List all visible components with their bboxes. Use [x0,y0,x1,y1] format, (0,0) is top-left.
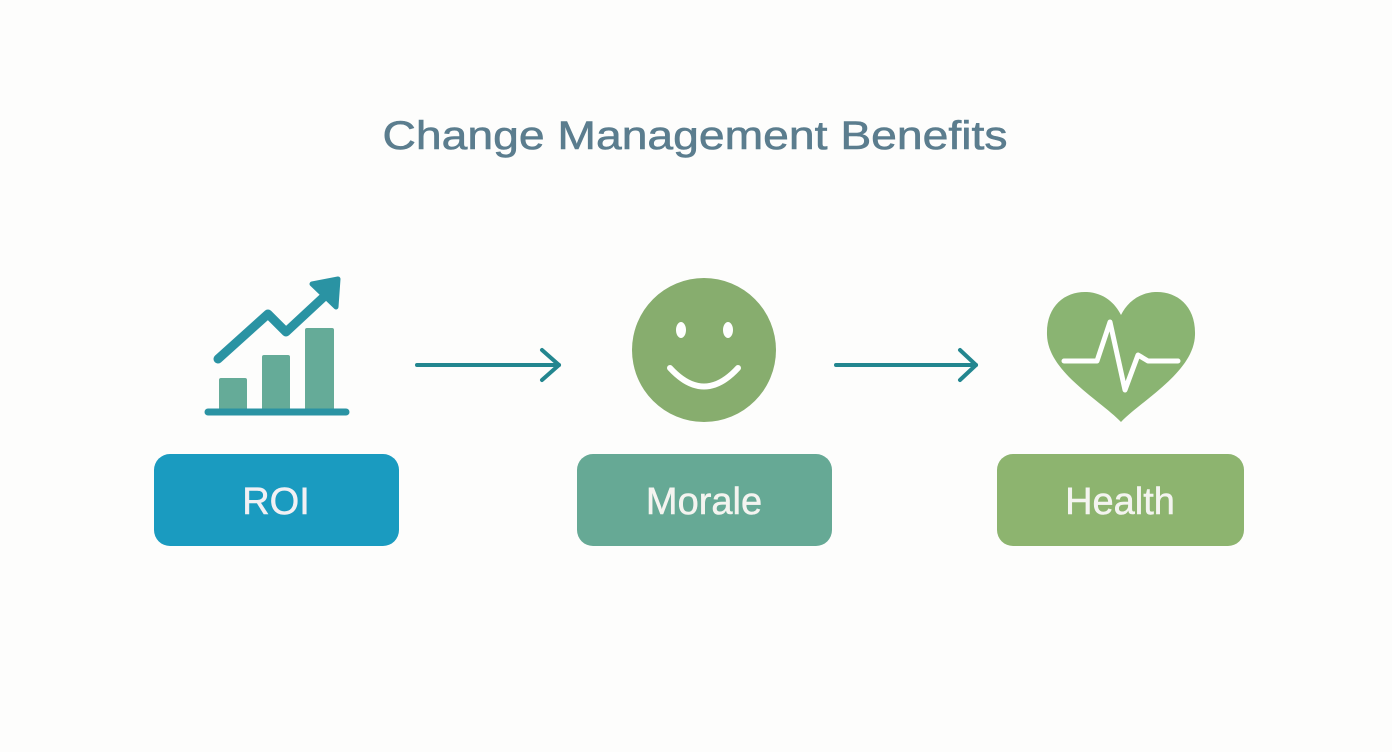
arrow 2 [836,350,976,380]
title: Change Management Benefits [382,114,1008,158]
label: ROI: ROI [242,481,310,523]
label: Health: Health [1065,481,1175,523]
arrow 1 [417,350,559,380]
icon: heart with pulse [1047,292,1195,422]
label: Morale [577,454,832,546]
icon: growth chart [208,279,346,414]
label: ROI [154,454,399,546]
label: Morale: Morale [646,481,762,523]
icon: smiley [632,278,776,422]
label: Health [997,454,1244,546]
